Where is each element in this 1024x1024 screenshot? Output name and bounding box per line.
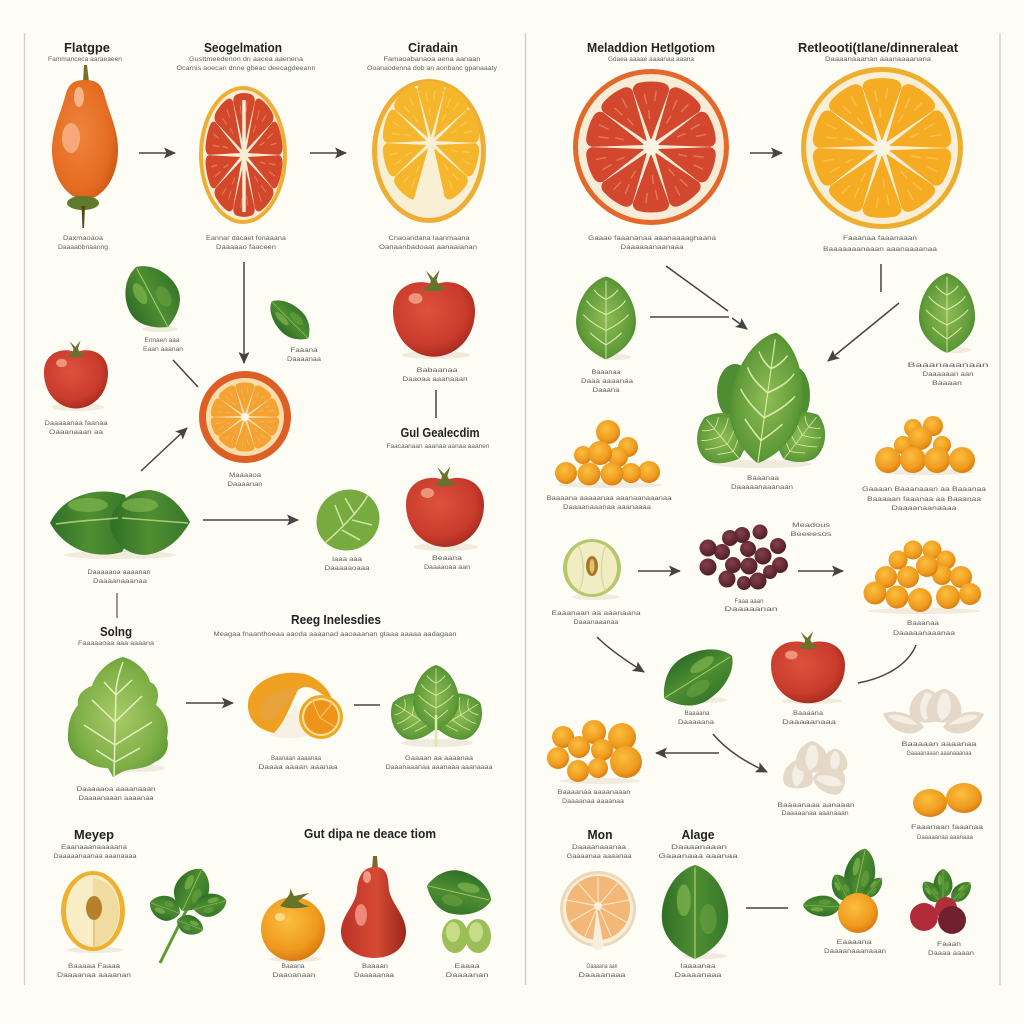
- icon: small leaf: [262, 292, 318, 348]
- subheading: Gdaea aaaae aaaanaa aaana: [608, 56, 694, 63]
- caption: [424, 555, 470, 571]
- subheading: Gusttmeedenon dn aacea aaenena: [189, 56, 303, 63]
- icon: yellow citrus slice: [372, 79, 486, 223]
- caption: Daaaanaaa: [674, 972, 722, 979]
- heading: Meladdion Hetlgotiom: [587, 41, 715, 55]
- subheading: [54, 844, 137, 860]
- caption: Eaaaa: [454, 963, 480, 970]
- subheading: Gaaanaaa aaanaa: [658, 853, 738, 860]
- caption: Beaana: [432, 555, 462, 562]
- connector: [435, 390, 437, 418]
- caption: [228, 472, 263, 488]
- caption: Daaaanan: [446, 972, 489, 979]
- caption: Baaaana aaaaanaa aaanaanaaanaa: [546, 495, 672, 502]
- caption: Cnaoandana Iaanmaana: [388, 235, 470, 242]
- icon: orange berries: [555, 420, 662, 488]
- caption: Daaaaanaa faanaa: [44, 420, 108, 427]
- caption: Faaana: [290, 347, 318, 354]
- caption: Daaaaanaaanaan: [731, 484, 793, 491]
- heading: Meyep: [74, 828, 114, 842]
- icon: dark berries: [700, 524, 788, 590]
- subheading: Ooanaodenna dob an aonbanc gpanaaaty: [367, 65, 498, 72]
- caption: [928, 941, 974, 957]
- connector: [746, 907, 788, 909]
- arrow: [310, 152, 346, 154]
- caption: Daaoaa aaanaaan: [402, 376, 468, 383]
- icon: cut orange: [248, 673, 343, 739]
- garlic item: [883, 688, 984, 757]
- orange slice item: [199, 371, 291, 488]
- heading: Alage: [682, 828, 715, 842]
- arrow: [173, 360, 198, 387]
- caption: Baaanaa: [592, 369, 621, 376]
- subheading: Meagaa fnaanthoeaa aaoda aaaanad aaoaaanan gtaaa aaaaa aadagaan: [214, 631, 457, 638]
- caption: Daaaaanaa aaanaaa: [917, 834, 973, 841]
- caption: [908, 362, 989, 387]
- caption: Baaaan: [362, 963, 388, 970]
- step: Solng lettuce: [68, 625, 168, 802]
- subheading: Daaaanaaanan aaanaaaanana: [825, 56, 931, 63]
- icon: leaf: [576, 276, 636, 360]
- caption: Faaa aaan: [734, 598, 764, 605]
- caption: Daaaanaaa: [578, 972, 626, 979]
- caption: Daaaa aaaan: [928, 950, 974, 957]
- caption: Baaaanaaa aanaaan: [778, 802, 855, 809]
- subheading: Ocarnis aoecan dnne gbeac deecagdeeann: [176, 65, 316, 72]
- icon: half apple: [61, 871, 125, 953]
- icon: large lettuce: [684, 328, 838, 476]
- arrow: [243, 262, 245, 363]
- beans item: [422, 864, 496, 979]
- caption: Gaaaan aa aaaanaa: [405, 755, 473, 762]
- icon: orange with leaves: [803, 845, 886, 933]
- side label: [790, 522, 833, 538]
- heading: Seogelmation: [204, 41, 282, 55]
- caption: Gaaaan Baaanaaan aa Baaanaa: [862, 486, 986, 493]
- icon: lettuce: [68, 657, 168, 777]
- double leaf item: [50, 490, 190, 585]
- caption: Daaaaaanaanaaa: [620, 244, 684, 251]
- caption: [581, 369, 633, 394]
- caption: Daaana: [592, 387, 620, 394]
- arrow: [186, 702, 233, 704]
- subheading: [566, 844, 632, 860]
- caption: [324, 556, 370, 572]
- caption: [782, 710, 837, 726]
- caption: [143, 337, 183, 353]
- icon: garlic cloves: [883, 688, 984, 734]
- caption: Daaaaanaaanaa: [893, 630, 955, 637]
- subheading: Famaoabanaoa aena aanaan: [384, 56, 481, 63]
- caption: [258, 755, 338, 771]
- orange berries mound item: [864, 540, 981, 637]
- icon: apple: [44, 341, 108, 411]
- icon: orange berries: [875, 416, 975, 475]
- connector: [116, 593, 118, 618]
- arrow: [798, 570, 843, 572]
- leaf item: [576, 276, 636, 394]
- caption: Daaaaanaaa: [782, 719, 837, 726]
- arrow: [597, 637, 644, 672]
- caption: [206, 235, 286, 251]
- lettuce item: [380, 665, 493, 771]
- icon: leaf: [113, 254, 191, 340]
- caption: [902, 741, 977, 757]
- caption: Daaaabbnaanng: [58, 244, 108, 251]
- arrow: [139, 152, 175, 154]
- caption: Maaaaoa: [229, 472, 261, 479]
- caption: Gaaaana aan: [586, 963, 618, 970]
- caption: Gaaae faaananaa aaanaaaaghaana: [588, 235, 716, 242]
- caption: Baaaaan aaaanaa: [902, 741, 977, 748]
- caption: [379, 235, 477, 251]
- caption: [778, 802, 855, 817]
- arrow: [650, 316, 729, 318]
- heading: Reeg Inelesdies: [214, 613, 457, 638]
- arrow: [638, 570, 680, 572]
- icon: two oranges: [913, 783, 982, 817]
- icon: dark leaf: [651, 635, 745, 719]
- caption: Daaa aaaanaa: [581, 378, 633, 385]
- subheading: [367, 56, 498, 72]
- orange berries item: [862, 416, 986, 512]
- orange cluster item: [547, 720, 642, 805]
- cut orange item: [248, 673, 343, 771]
- pear item: [341, 856, 406, 979]
- caption: Daaaanaanaaaa: [892, 505, 957, 512]
- caption: Daaanaaanaa aaanaaa aaanaaaa: [386, 764, 493, 771]
- caption: [402, 367, 468, 383]
- arrow: [732, 318, 747, 329]
- step: Meyep half apple: [54, 828, 137, 979]
- icon: orange slice: [199, 371, 291, 463]
- caption: Eaaaana: [836, 939, 872, 946]
- icon: papaya: [52, 65, 118, 228]
- arrow: [203, 519, 298, 521]
- arrow: [141, 428, 187, 471]
- caption: [678, 710, 714, 726]
- caption: [862, 486, 986, 512]
- subheading: [658, 844, 738, 860]
- caption: Daaaaanan: [724, 606, 778, 613]
- caption: [354, 963, 394, 979]
- tomato item: [393, 270, 475, 383]
- icon: green leaf: [662, 865, 728, 959]
- two oranges item: [911, 783, 984, 841]
- caption: [44, 420, 108, 436]
- icon: tomato: [771, 631, 845, 704]
- icon: orange berries: [547, 720, 642, 784]
- panel: left column: [44, 41, 498, 979]
- caption: Eaaanaan aa aaanaana: [552, 610, 641, 617]
- caption: Eaan aaanan: [143, 346, 183, 353]
- caption: [386, 755, 493, 771]
- subheading: Daaaanaaan: [671, 844, 728, 851]
- icon: leaf with green fruit: [422, 864, 496, 953]
- heading: Mon: [588, 828, 612, 842]
- icon: orange slice: [801, 67, 963, 229]
- caption: [724, 598, 778, 613]
- heading: Gul Gealecdim: [400, 426, 480, 440]
- step: Gul Gealecdim tomato: [386, 426, 490, 571]
- icon: tomato: [393, 270, 475, 359]
- caption: [287, 347, 321, 363]
- caption: Baaanaa: [907, 620, 939, 627]
- caption: Daaaaaan aan: [922, 371, 974, 378]
- caption: Daaaanaa aaaanan: [57, 972, 131, 979]
- icon: red pear: [341, 856, 406, 958]
- caption: [578, 963, 626, 979]
- leaf item: [113, 254, 191, 353]
- icon: lettuce cluster: [380, 665, 493, 749]
- curved arrow: [858, 645, 916, 683]
- orange berries pyramid item: [546, 420, 672, 511]
- caption: [731, 475, 793, 491]
- caption: Iaaaanaa: [680, 963, 716, 970]
- icon: pale citrus slice: [560, 871, 636, 950]
- caption: Baaana: [282, 963, 305, 970]
- orange with leaves item: [803, 845, 886, 955]
- apple item: [44, 341, 108, 436]
- small leaf item: [262, 292, 321, 363]
- subheading: [176, 56, 316, 72]
- caption: Daaaaaoa aaaanaaan: [76, 786, 156, 793]
- step: Flatgpe papaya: [48, 41, 122, 251]
- caption: Oaaanaaan aa: [49, 429, 103, 436]
- subheading: Fammanceca aaraeaeen: [48, 56, 122, 63]
- curved arrow: [713, 734, 767, 772]
- caption: Faaanaan faaanaa: [911, 824, 984, 831]
- caption: [911, 824, 984, 841]
- arrow: [656, 752, 719, 754]
- caption: Daaanaaanaa: [574, 619, 619, 626]
- side label: Meadous: [792, 522, 831, 529]
- caption: Daaaaanaa aaanaaan: [782, 810, 849, 817]
- red berries item: [910, 869, 976, 957]
- dark leaf item: [651, 635, 745, 726]
- step: Ciradain citrus: [367, 41, 498, 251]
- caption: Baaaaa Faaaa: [68, 963, 120, 970]
- orange item: [261, 888, 325, 979]
- caption: Daaaaoaa aan: [424, 564, 470, 571]
- icon: double leaf: [50, 490, 190, 559]
- caption: Daxmaoaoa: [63, 235, 103, 242]
- caption: [893, 620, 955, 637]
- caption: Daaaaana: [678, 719, 714, 726]
- caption: Daaoanaan: [272, 972, 316, 979]
- caption: Daaaanaa: [287, 356, 321, 363]
- subheading: Eaanaaanaaaaana: [61, 844, 127, 851]
- caption: [546, 495, 672, 511]
- caption: Baaaaan faaanaa aa Baaanaa: [867, 496, 981, 503]
- caption: Baaanaa: [747, 475, 779, 482]
- caption: Baaaan: [932, 380, 962, 387]
- caption: Daaaaaoaaa: [324, 565, 370, 572]
- caption: [58, 235, 108, 251]
- central lettuce item: [684, 328, 838, 491]
- caption: [558, 789, 631, 805]
- caption: [588, 235, 716, 251]
- half green apple item: [552, 539, 641, 626]
- caption: [57, 963, 131, 979]
- caption: Baaaana: [684, 710, 710, 717]
- caption: Eannar dacaet fonaaana: [206, 235, 286, 242]
- icon: herb sprig: [146, 862, 229, 963]
- tomato item: [771, 631, 845, 726]
- caption: [823, 235, 937, 253]
- panel: right column: [546, 41, 989, 979]
- step: Mon citrus: [560, 828, 636, 979]
- caption: [272, 963, 316, 979]
- caption: Baaaaaaanaaan aaanaaaanaa: [823, 246, 937, 253]
- icon: tomato: [406, 466, 484, 551]
- arrow: [828, 303, 899, 361]
- subheading: Gaaaanaa aaaanaa: [566, 853, 632, 860]
- caption: Daaaaao faaceen: [216, 244, 276, 251]
- heading: Gut dipa ne deace tiom: Gut dipa ne deace tiom: [304, 827, 436, 841]
- step: Meladdion Hetlgotiom grapefruit: [573, 41, 729, 251]
- subheading: Faaaaaoaa aaa aaaana: [78, 640, 154, 647]
- heading: Flatgpe: [64, 41, 110, 55]
- side label: Beeeesos: [790, 531, 833, 538]
- icon: red berries with leaves: [910, 869, 976, 934]
- garlic item: [778, 741, 855, 817]
- step: Retleooti orange: [798, 41, 963, 253]
- icon: orange berries: [864, 540, 981, 614]
- heading: Reeg Inelesdies: [291, 613, 381, 627]
- caption: [76, 786, 156, 802]
- subheading: Faacaanaan aaanaa aanaa aaanen: [386, 443, 490, 450]
- heading: Solng: [100, 625, 132, 639]
- caption: [88, 569, 151, 585]
- heading: Retleooti(tlane/dinneraleat: [798, 41, 959, 55]
- icon: round leaf: [305, 478, 391, 562]
- icon: grapefruit slice: [573, 69, 729, 225]
- caption: Babaanaa: [416, 367, 458, 374]
- caption: Daaaanaa aaaanaa: [562, 798, 624, 805]
- caption: Baaanaaanaan: [908, 362, 989, 369]
- caption: Ennaen aaa: [144, 337, 180, 344]
- dark berries item: [700, 524, 788, 613]
- caption: Daaaaanaa: [354, 972, 394, 979]
- subheading: Daaaanaaanaa: [572, 844, 626, 851]
- round leaf item: [305, 478, 391, 572]
- icon: red segmented fruit: [199, 86, 287, 224]
- leaf item: [908, 273, 989, 387]
- caption: Daaaanan: [228, 481, 263, 488]
- caption: Daaaanaaanaa aaanaaaa: [563, 504, 651, 511]
- step: Alage leaf: [658, 828, 738, 979]
- icon: orange: [261, 888, 325, 962]
- caption: Gaaaanaaan aaanaaanaa: [906, 750, 972, 757]
- subheading: Daaaaanaanaa aaanaaaa: [54, 853, 137, 860]
- icon: leaf: [919, 273, 975, 353]
- arrow: [666, 266, 728, 311]
- caption: Daaaanaaanaa: [93, 578, 147, 585]
- caption: Baaaana: [793, 710, 823, 717]
- arrow: [750, 152, 782, 154]
- caption: Baaaanaa aaaanaaan: [558, 789, 631, 796]
- caption: Daaaanaaanaaan: [824, 948, 886, 955]
- caption: Baanaan aaaanaa: [271, 755, 321, 762]
- connector: [354, 704, 380, 706]
- heading: Ciradain: [408, 41, 458, 55]
- icon: half green fruit: [563, 539, 621, 600]
- step: Seogelmation segment fruit: [176, 41, 316, 251]
- caption: Oanaanbadoaat aanaaianan: [379, 244, 477, 251]
- caption: Daaaaaoa aaaanan: [88, 569, 151, 576]
- caption: Daaaanaaan aaaanaa: [78, 795, 154, 802]
- caption: Faaan: [937, 941, 961, 948]
- caption: Faaanaa faaanaaan: [843, 235, 917, 242]
- caption: Daaaa aaaan aaanaa: [258, 764, 338, 771]
- caption: [674, 963, 722, 979]
- caption: [446, 963, 489, 979]
- caption: Iaaa aaa: [332, 556, 362, 563]
- caption: [552, 610, 641, 626]
- connector: [880, 264, 882, 292]
- icon: garlic cloves: [783, 741, 847, 796]
- caption: [824, 939, 886, 955]
